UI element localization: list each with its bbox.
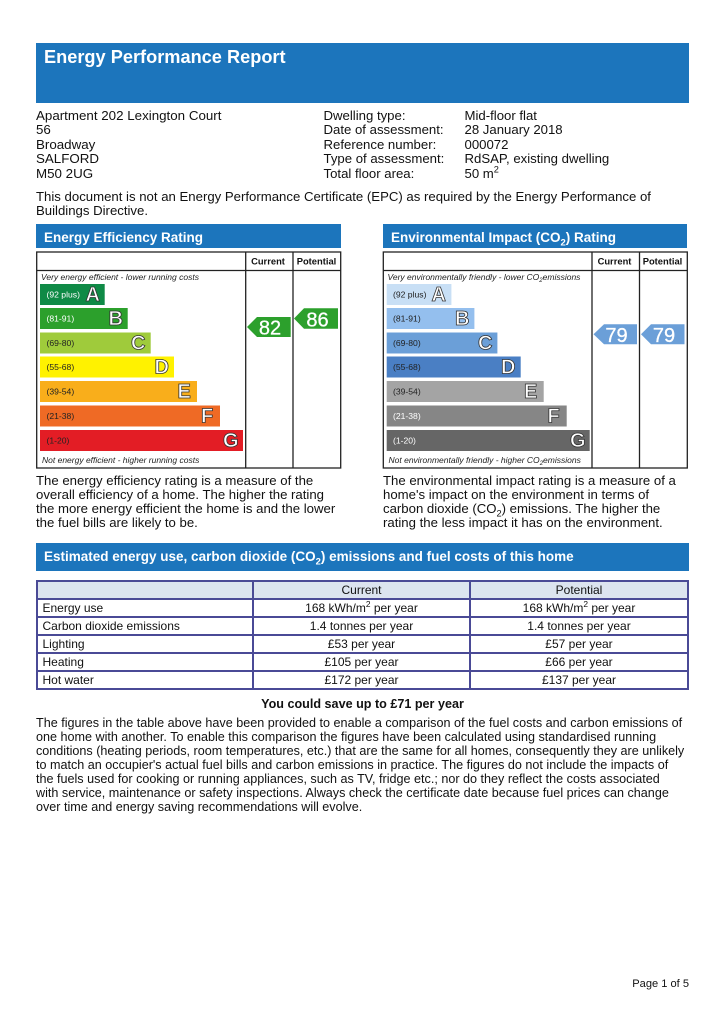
band B: (81-91) — [393, 314, 421, 324]
energy use and costs table: £105 per year — [324, 654, 399, 668]
title banner — [36, 43, 689, 103]
disclaimer text: This document is not an Energy Performance Certificate (EPC) as required by the Energy Performance of — [36, 188, 651, 204]
chart: energy efficiency: Current — [251, 256, 285, 266]
chart: energy efficiency — [37, 252, 341, 468]
heading: energy efficiency rating — [36, 224, 341, 248]
band F: (21-38) — [393, 411, 421, 421]
band G: G — [570, 430, 586, 452]
environmental rating explanation: home's impact on the environment in terms of — [383, 487, 649, 502]
band C — [387, 332, 497, 354]
band A — [387, 284, 451, 306]
chart: environmental impact: Not environmentally friendly - higher CO — [388, 455, 540, 465]
band D: D — [154, 356, 169, 378]
potential score arrow 86: 86 — [306, 310, 329, 332]
band G: (1-20) — [393, 436, 416, 446]
dwelling detail values: Mid-floor flat — [464, 108, 537, 122]
band G — [40, 430, 243, 452]
band D — [40, 356, 174, 378]
energy rating explanation: The energy efficiency rating is a measure of the — [36, 472, 313, 488]
energy use and costs table: Energy use — [42, 600, 103, 614]
heading: energy efficiency rating: Energy Efficiency Rating — [44, 230, 203, 245]
current score arrow 79 — [594, 324, 637, 347]
band F: F — [548, 406, 560, 428]
chart: environmental impact: Current — [598, 256, 631, 266]
dwelling detail labels: Total floor area: — [324, 166, 414, 181]
band D: (55-68) — [393, 362, 421, 372]
chart: environmental impact: Potential — [643, 256, 682, 266]
band G: (1-20) — [46, 436, 70, 446]
band E: (39-54) — [46, 386, 74, 396]
band F — [387, 406, 567, 428]
energy use and costs table: £53 per year — [328, 636, 395, 650]
energy rating explanation — [36, 472, 336, 530]
dwelling detail values: 50 m2 — [464, 164, 499, 181]
energy use and costs table: Carbon dioxide emissions — [42, 618, 180, 632]
energy use and costs table — [36, 580, 689, 690]
table explanation text: The figures in the table above have been provided to enable a comparison of the fuel costs and carbon emissions of — [36, 716, 682, 730]
dwelling detail values: RdSAP, existing dwelling — [464, 151, 609, 166]
table explanation text: conditions (heating periods, room temperatures, etc.) that are the same for all homes, consequently they are unlikely — [36, 744, 684, 758]
dwelling detail labels: Reference number: — [324, 137, 436, 152]
environmental rating explanation — [383, 472, 676, 530]
disclaimer text: Buildings Directive. — [36, 203, 148, 218]
band C: C — [478, 332, 492, 354]
energy use and costs table: £137 per year — [542, 672, 616, 686]
band F: (21-38) — [46, 411, 74, 421]
chart: environmental impact — [383, 252, 687, 468]
band C: (69-80) — [46, 338, 74, 348]
energy use and costs table: 168 kWh/m2 per year — [523, 598, 635, 614]
band F: F — [201, 406, 213, 428]
heading: estimated energy use — [36, 543, 689, 571]
band C: (69-80) — [393, 338, 421, 348]
energy use and costs table: 168 kWh/m2 per year — [305, 598, 418, 614]
chart: environmental impact: emissions — [543, 272, 581, 282]
heading: environmental impact rating: Environmental Impact (CO2) Rating — [391, 230, 616, 249]
energy use and costs table: 1.4 tonnes per year — [310, 618, 413, 632]
energy use and costs table: £66 per year — [545, 654, 613, 668]
band E: (39-54) — [393, 386, 421, 396]
address block: SALFORD — [36, 151, 99, 166]
energy use and costs table: £57 per year — [545, 636, 613, 650]
band B: B — [108, 308, 123, 330]
address block: M50 2UG — [36, 166, 93, 181]
band D — [387, 356, 521, 378]
band C — [40, 332, 151, 354]
current score arrow 82: 82 — [259, 318, 281, 340]
heading: environmental impact rating — [383, 224, 687, 248]
table explanation text: the fuels used for cooking or running appliances, such as TV, fridge etc.; nor do they reflect the costs associated — [36, 772, 660, 786]
energy use and costs table: Lighting — [42, 636, 85, 650]
title banner: Energy Performance Report — [44, 47, 286, 67]
table explanation text: one home with another. To enable this comparison the figures have been calculated using standardised running — [36, 730, 656, 744]
table explanation text: with service, maintenance or safety inspections. Always check the certificate date because fuel prices can change — [36, 786, 669, 800]
chart: environmental impact: Very environmentally friendly - lower CO — [388, 272, 539, 282]
band F — [40, 406, 220, 428]
table explanation text: to match an occupier's actual fuel bills and carbon emissions in practice. The figures do not include the impacts of — [36, 758, 668, 772]
address block — [36, 108, 222, 181]
potential score arrow 86 — [294, 308, 338, 332]
chart: environmental impact: 2 — [539, 461, 544, 467]
potential score arrow 79: 79 — [653, 325, 675, 347]
environmental rating explanation: The environmental impact rating is a measure of a — [383, 472, 676, 488]
band D: (55-68) — [46, 362, 74, 372]
band E — [387, 381, 544, 403]
energy rating explanation: overall efficiency of a home. The higher the rating — [36, 487, 324, 502]
heading: estimated energy use: Estimated energy use, carbon dioxide (CO2) emissions and fuel costs of this home — [44, 549, 574, 568]
page number: Page 1 of 5 — [632, 978, 689, 990]
band A: (92 plus) — [46, 290, 80, 300]
band G: G — [223, 430, 239, 452]
energy use and costs table: Current — [341, 582, 382, 596]
band A: A — [432, 284, 446, 306]
band A: (92 plus) — [393, 290, 427, 300]
energy rating explanation: the more energy efficient the home is and the lower — [36, 501, 335, 516]
current score arrow 79: 79 — [605, 325, 628, 347]
band B: (81-91) — [46, 314, 74, 324]
address block: Broadway — [36, 137, 95, 152]
dwelling detail labels: Dwelling type: — [324, 108, 406, 122]
dwelling detail labels — [324, 108, 444, 181]
disclaimer text — [36, 188, 651, 218]
energy use and costs table: Hot water — [42, 672, 94, 686]
band G — [387, 430, 590, 452]
band B — [387, 308, 474, 330]
band B — [40, 308, 128, 330]
chart: environmental impact: 2 — [538, 278, 543, 284]
current score arrow 82 — [247, 317, 291, 340]
table explanation text: over time and energy saving recommendations will evolve. — [36, 800, 362, 814]
chart: energy efficiency: Very energy efficient - lower running costs — [41, 272, 200, 282]
potential score arrow 79 — [641, 324, 684, 347]
chart: energy efficiency: Potential — [297, 256, 336, 266]
band E: E — [178, 381, 191, 403]
dwelling detail values: 28 January 2018 — [464, 122, 563, 137]
energy use and costs table: Heating — [42, 654, 84, 668]
chart: environmental impact: emissions — [543, 455, 582, 465]
chart: energy efficiency: Not energy efficient - higher running costs — [42, 455, 200, 465]
band B: B — [455, 308, 469, 330]
environmental rating explanation: carbon dioxide (CO2) emissions. The higher the — [383, 501, 660, 519]
energy use and costs table: 1.4 tonnes per year — [527, 618, 631, 632]
band C: C — [131, 332, 145, 354]
band E: E — [524, 381, 537, 403]
energy use and costs table: Potential — [556, 582, 602, 596]
band E — [40, 381, 197, 403]
dwelling detail values — [464, 108, 609, 181]
dwelling detail labels: Type of assessment: — [324, 151, 444, 166]
address block: Apartment 202 Lexington Court — [36, 108, 221, 122]
band A: A — [86, 284, 100, 306]
savings callout: You could save up to £71 per year — [261, 697, 464, 711]
energy rating explanation: the fuel bills are likely to be. — [36, 515, 198, 530]
band A — [40, 284, 105, 306]
energy use and costs table: £172 per year — [324, 672, 399, 686]
environmental rating explanation: rating the less impact it has on the environment. — [383, 515, 663, 530]
address block: 56 — [36, 122, 51, 137]
dwelling detail labels: Date of assessment: — [324, 122, 444, 137]
band D: D — [501, 356, 515, 378]
dwelling detail values: 000072 — [464, 137, 508, 152]
table explanation text — [36, 716, 684, 814]
